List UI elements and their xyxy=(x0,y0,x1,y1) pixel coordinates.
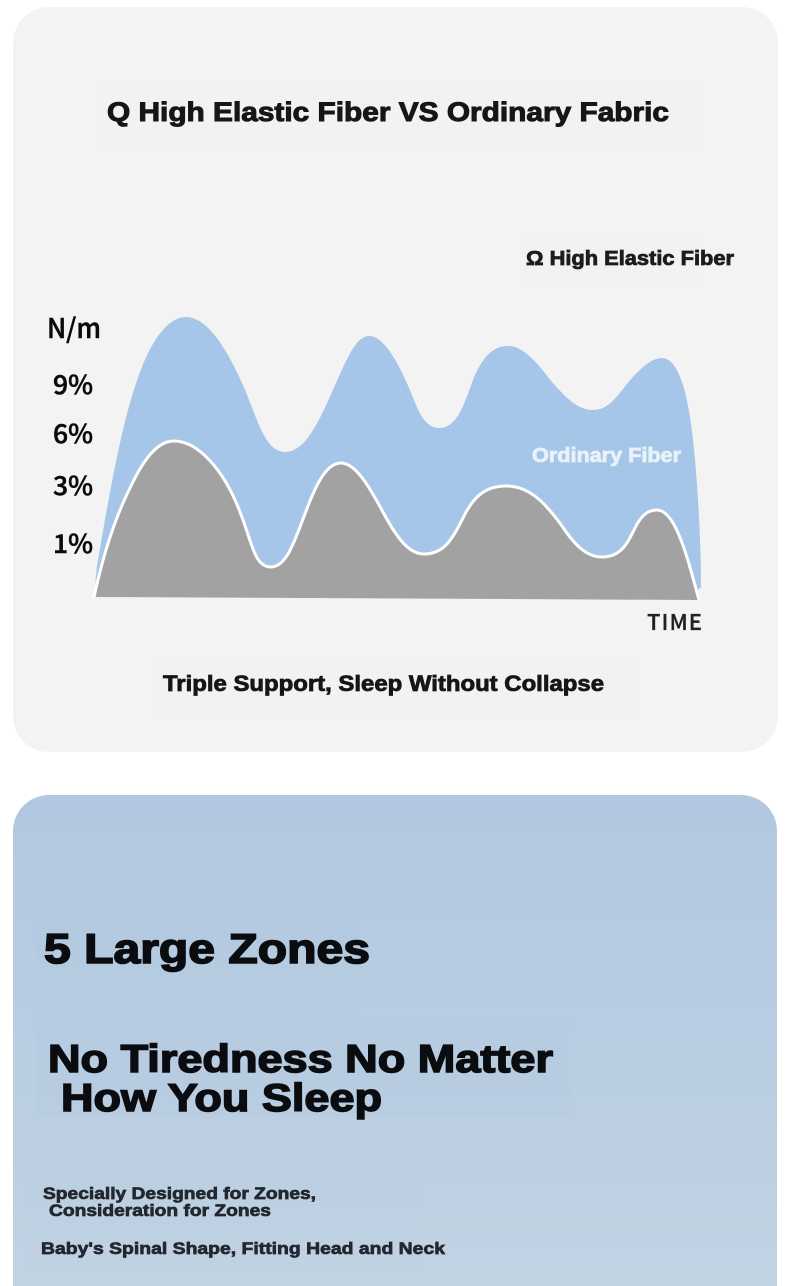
y-axis labels: 3% xyxy=(53,466,93,503)
area: ordinary fiber curve xyxy=(94,441,699,600)
x-axis label: TIME xyxy=(647,605,702,637)
heading: fiber comparison: Q High Elastic Fiber VS Ordinary Fabric xyxy=(107,97,669,127)
text: zone description: Specially Designed for Zones, xyxy=(43,1184,316,1203)
area: high elastic fiber curve xyxy=(94,317,701,597)
y-axis labels: N/m xyxy=(47,307,101,346)
y-axis labels: 1% xyxy=(53,524,93,561)
text: zone description: Consideration for Zones xyxy=(49,1201,271,1220)
panel: zones xyxy=(13,795,777,1286)
label: ordinary fiber: Ordinary Fiber xyxy=(532,445,681,467)
y-axis labels: 6% xyxy=(53,414,93,451)
heading: no tiredness: How You Sleep xyxy=(61,1077,382,1120)
caption: triple support: Triple Support, Sleep Without Collapse xyxy=(163,671,604,696)
curve outline xyxy=(94,441,699,600)
heading: 5 large zones: 5 Large Zones xyxy=(44,925,370,972)
y-axis labels xyxy=(47,307,101,561)
heading: no tiredness: No Tiredness No Matter xyxy=(48,1038,553,1081)
legend: high elastic fiber: Ω High Elastic Fiber xyxy=(526,248,734,270)
y-axis labels: 9% xyxy=(53,365,93,402)
heading: no tiredness xyxy=(48,1038,553,1120)
text: spinal shape: Baby's Spinal Shape, Fitting Head and Neck xyxy=(41,1239,446,1258)
panel: fiber comparison xyxy=(13,7,778,752)
text: zone description xyxy=(43,1184,316,1220)
